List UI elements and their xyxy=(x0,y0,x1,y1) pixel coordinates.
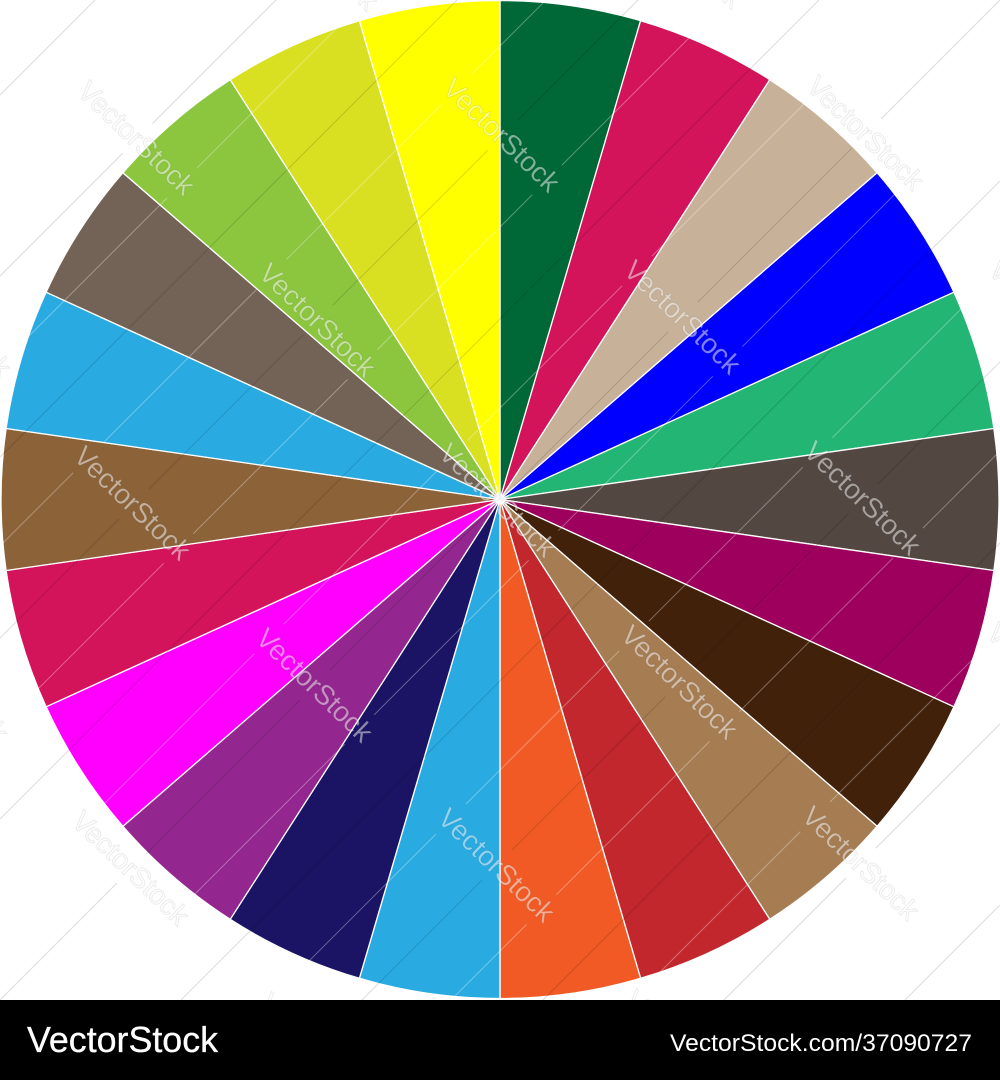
watermark text: VectorStock xyxy=(798,435,928,562)
slice 18: sky blue xyxy=(6,292,500,500)
watermark text: VectorStock xyxy=(72,75,202,202)
slice 9: light brown xyxy=(500,500,877,919)
watermark text: VectorStock xyxy=(68,440,198,567)
watermark text: VectorStock xyxy=(615,619,745,746)
slice 12: sky blue xyxy=(359,500,500,998)
slice 5: emerald green xyxy=(500,292,994,500)
slice 1: dark green xyxy=(500,0,641,499)
slice 8: dark brown xyxy=(500,500,954,826)
watermark text: VectorStock xyxy=(801,70,931,197)
watermark text: VectorStock xyxy=(618,254,748,381)
slice 10: red xyxy=(500,500,770,978)
slice 7: plum xyxy=(500,500,994,707)
pie centre highlight xyxy=(496,496,504,504)
slice 3: tan xyxy=(500,80,877,499)
footer image id text: VectorStock.com/37090727 xyxy=(670,1030,972,1057)
slice 22: yellow xyxy=(359,0,500,499)
watermark text: Ve xyxy=(619,984,664,1029)
slice 14: purple xyxy=(123,500,500,919)
watermark text: VectorStock xyxy=(432,802,562,929)
watermark text: VectorStock xyxy=(437,72,567,199)
slice 16: crimson xyxy=(6,500,500,707)
footer bar xyxy=(0,1000,1000,1080)
watermark text: Ve xyxy=(254,987,299,1032)
slice 2: crimson xyxy=(500,21,770,499)
watermark text: VectorStock xyxy=(250,622,380,749)
watermark text: VectorStock xyxy=(796,800,926,927)
slice 17: brown xyxy=(1,428,500,570)
slice 19: grey brown xyxy=(46,173,500,499)
watermark text: VectorStock xyxy=(66,805,196,932)
slice 4: blue xyxy=(500,173,954,499)
slice 21: yellow green xyxy=(230,21,500,499)
slice 6: charcoal brown xyxy=(500,428,999,570)
slice 13: navy xyxy=(230,500,500,978)
slice 15: magenta xyxy=(46,500,500,826)
footer logo text: VectorStock xyxy=(27,1019,219,1060)
slice 11: orange xyxy=(500,500,641,998)
watermark text: VectorStock xyxy=(253,257,383,384)
slice 20: lime green xyxy=(123,80,500,499)
watermark text: VectorStock xyxy=(433,437,563,564)
